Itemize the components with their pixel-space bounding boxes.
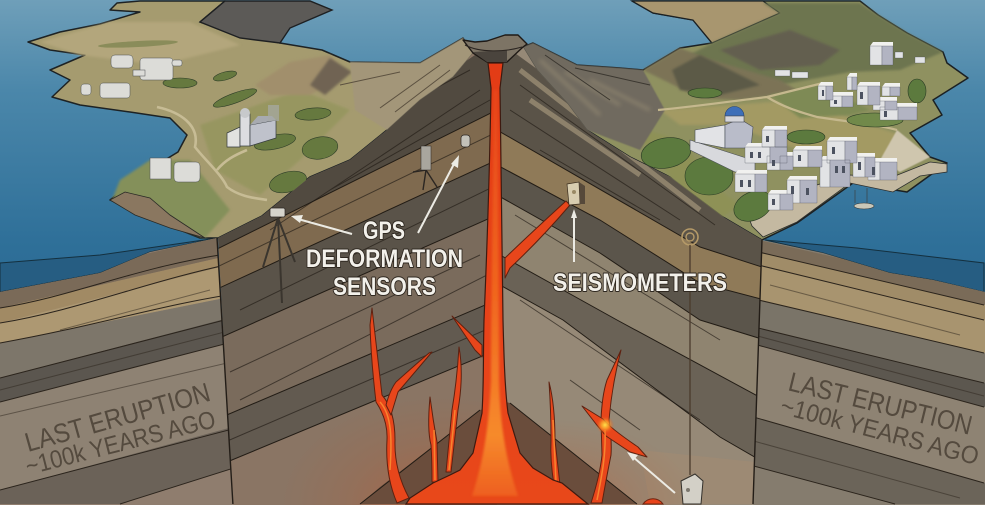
label: last eruption left: ~100k YEARS AGO <box>23 406 218 481</box>
road <box>658 83 897 130</box>
label: GPS deformation sensors <box>306 217 463 301</box>
label: seismometers: SEISMOMETERS <box>553 269 727 297</box>
lava dikes <box>370 201 647 503</box>
building sides <box>755 46 917 210</box>
volcano right flank <box>523 43 665 150</box>
volcano left flank <box>350 38 473 130</box>
label: GPS deformation sensors: GPS <box>363 217 405 245</box>
arrows <box>291 155 675 493</box>
magma glow spot <box>596 416 614 434</box>
GPS sensor 2 with tripod <box>413 146 437 190</box>
village: right island <box>690 42 925 210</box>
arrow: label to GPS sensor <box>291 215 352 234</box>
rocky cliff <box>110 192 205 238</box>
right island <box>523 1 968 240</box>
church: left island <box>227 105 279 147</box>
building windows <box>740 90 887 205</box>
arrow: box to magma spot <box>627 452 675 493</box>
shrubs: right island <box>639 79 926 227</box>
crater <box>463 35 527 62</box>
sea background <box>0 0 985 300</box>
pier and harbour wall <box>745 162 947 237</box>
deformation sensor near summit <box>461 135 470 147</box>
label: GPS deformation sensors: DEFORMATION <box>306 245 463 273</box>
face edges <box>217 238 762 504</box>
seismometer box lower <box>681 474 703 504</box>
lava: conduit and magma chamber <box>370 63 663 504</box>
GPS sensor 1 with tripod <box>263 208 295 303</box>
boat <box>854 188 874 209</box>
label: last eruption left: LAST ERUPTION <box>22 377 213 458</box>
heat tint near magma <box>336 434 497 505</box>
dark mountain <box>200 1 332 43</box>
arrow: label to seismometer <box>571 209 577 262</box>
building fronts <box>735 46 925 210</box>
left island <box>28 1 473 238</box>
church with blue dome <box>690 106 755 172</box>
seismometer ring and cable <box>682 229 698 475</box>
arrow: label to deformation sensor <box>418 155 459 233</box>
sea front dark band right <box>765 240 984 292</box>
label: GPS deformation sensors: SENSORS <box>333 273 436 301</box>
cross-section: left central face <box>215 40 500 505</box>
cross-section: right outer face <box>750 230 985 505</box>
seismometer box upper <box>567 182 585 205</box>
main conduit and flare <box>406 63 588 504</box>
shrubs: left island <box>98 39 340 197</box>
road <box>157 107 267 200</box>
heat tint near magma <box>497 441 657 505</box>
cross-section: right central face <box>497 40 767 505</box>
village: left island <box>81 55 200 182</box>
cross-section: left outer face <box>0 230 240 505</box>
sea front dark band left <box>0 238 217 292</box>
building tops <box>735 42 917 194</box>
